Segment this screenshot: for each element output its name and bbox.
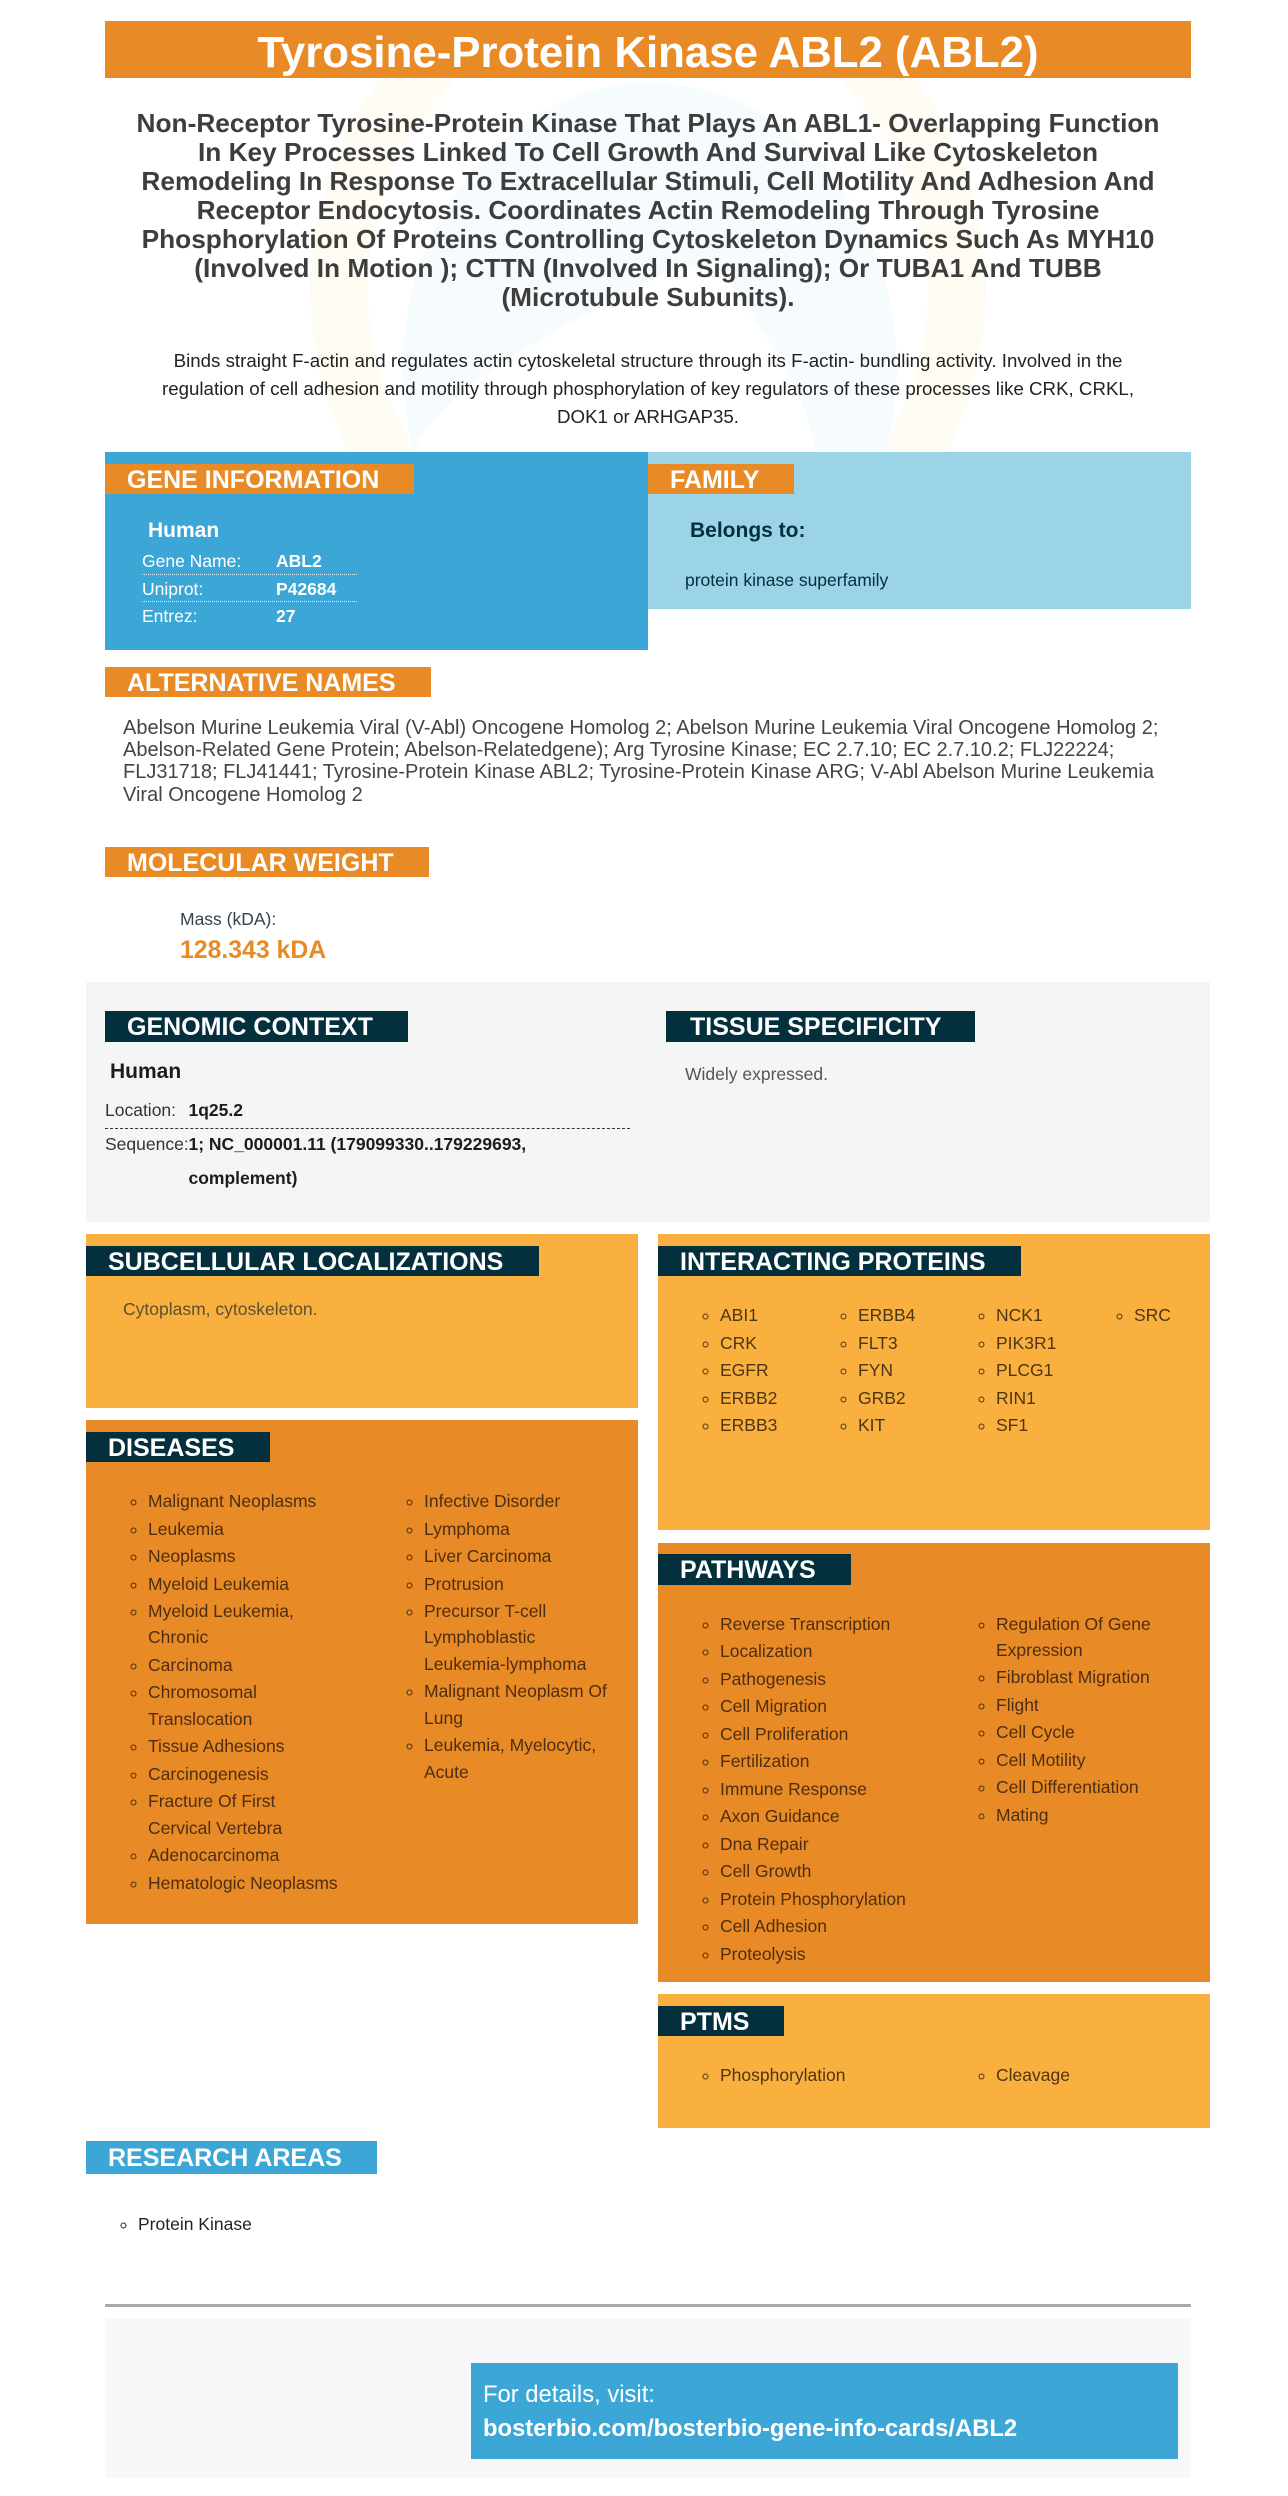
pathway list column 2: Flight [996, 1695, 1039, 1715]
protein list column 3: PIK3R1 [996, 1332, 1056, 1352]
heading: subcellular localizations: SUBCELLULAR LOCALIZATIONS [108, 1248, 503, 1276]
mass label: Mass (kDA): [180, 909, 276, 929]
panel: interacting proteins [658, 1234, 1210, 1530]
location row: 1q25.2 [188, 1100, 243, 1120]
heading: diseases: DISEASES [108, 1434, 234, 1462]
disease list column 1: Carcinoma [148, 1655, 233, 1675]
protein list column 1: EGFR [720, 1360, 769, 1380]
uniprot row [142, 576, 357, 602]
disease list column 1: Adenocarcinoma [148, 1845, 279, 1865]
pathway list column 1: Localization [720, 1641, 812, 1661]
alternative names text: Abelson-Related Gene Protein; Abelson-Relatedgene); Arg Tyrosine Kinase; EC 2.7.10; EC 2.7.10.2; FLJ22224; [123, 739, 1114, 761]
protein list column 3: SF1 [996, 1415, 1028, 1435]
sequence row: complement) [188, 1168, 297, 1188]
pathway list column 2 [978, 1614, 1151, 1825]
sequence row [105, 1134, 526, 1188]
panel: gene information [105, 452, 648, 650]
heading: ptms [658, 2006, 784, 2036]
protein list column 2: FYN [858, 1360, 893, 1380]
description paragraph: DOK1 or ARHGAP35. [557, 406, 739, 427]
pathway list column 1: Fertilization [720, 1751, 809, 1771]
pathway list column 2: Fibroblast Migration [996, 1667, 1150, 1687]
description paragraph [162, 350, 1134, 427]
pathway list column 1: Cell Migration [720, 1696, 827, 1716]
pathway list column 1: Reverse Transcription [720, 1614, 890, 1634]
description paragraph: regulation of cell adhesion and motility through phosphorylation of key regulators of these processes like CRK, CRKL, [162, 378, 1134, 399]
summary heading: Remodeling In Response To Extracellular Stimuli, Cell Motility And Adhesion And [141, 166, 1155, 196]
heading: family: FAMILY [670, 466, 759, 494]
disease list column 2: Leukemia, Myelocytic, [424, 1735, 596, 1755]
heading: pathways [658, 1554, 851, 1585]
pathway list column 1 [702, 1614, 906, 1964]
disease list column 2 [406, 1491, 607, 1782]
protein list column 1: CRK [720, 1332, 757, 1352]
tissue text: Widely expressed. [685, 1064, 828, 1084]
summary heading [137, 108, 1159, 312]
details link box [471, 2363, 1178, 2459]
details label: For details, visit: [483, 2381, 655, 2408]
heading: tissue specificity: TISSUE SPECIFICITY [690, 1013, 941, 1041]
heading: ptms: PTMS [680, 2008, 749, 2036]
entrez row: Entrez: [142, 606, 197, 626]
pathway list column 2: Expression [996, 1640, 1083, 1660]
disease list column 1: Tissue Adhesions [148, 1736, 285, 1756]
species label: Human [148, 519, 219, 542]
protein list column 2: GRB2 [858, 1388, 906, 1408]
background watermark logo [310, 78, 986, 452]
disease list column 2: Lymphoblastic [424, 1627, 535, 1647]
disease list column 2: Lung [424, 1708, 463, 1728]
disease list column 1: Leukemia [148, 1518, 224, 1538]
disease list column 1: Fracture Of First [148, 1791, 275, 1811]
heading: family [648, 464, 794, 494]
heading: research areas: RESEARCH AREAS [108, 2144, 342, 2172]
belongs to label: Belongs to: [690, 519, 806, 542]
disease list column 1: Neoplasms [148, 1546, 236, 1566]
research areas list: Protein Kinase [138, 2214, 252, 2234]
pathway list column 1: Cell Adhesion [720, 1916, 827, 1936]
summary heading: Non-Receptor Tyrosine-Protein Kinase That Plays An ABL1- Overlapping Function [137, 108, 1159, 138]
entrez row: 27 [276, 606, 295, 626]
footer rule [105, 2304, 1191, 2307]
disease list column 1 [130, 1491, 338, 1893]
gene name row: ABL2 [276, 551, 322, 571]
location row: Location: [105, 1100, 176, 1120]
alternative names text: Viral Oncogene Homolog 2 [123, 784, 363, 806]
summary heading: (Involved In Motion ); CTTN (Involved In Signaling); Or TUBA1 And TUBB [194, 253, 1102, 283]
protein list column 2 [840, 1305, 915, 1435]
uniprot row: P42684 [276, 579, 336, 599]
ptm list column 1: Phosphorylation [720, 2064, 846, 2084]
disease list column 2: Malignant Neoplasm Of [424, 1681, 607, 1701]
protein list column 1: ABI1 [720, 1305, 758, 1325]
protein list column 2: KIT [858, 1415, 885, 1435]
entrez row [142, 606, 295, 626]
sequence row: 1; NC_000001.11 (179099330..179229693, [188, 1134, 526, 1154]
pathway list column 2: Cell Differentiation [996, 1777, 1139, 1797]
disease list column 1: Hematologic Neoplasms [148, 1873, 338, 1893]
heading: research areas [86, 2141, 377, 2174]
protein list column 3 [978, 1305, 1056, 1435]
protein list column 3: PLCG1 [996, 1360, 1053, 1380]
heading: pathways: PATHWAYS [680, 1556, 816, 1584]
disease list column 2: Protrusion [424, 1574, 504, 1594]
protein list column 3: RIN1 [996, 1388, 1036, 1408]
title banner: Tyrosine-Protein Kinase ABL2 (ABL2) [257, 28, 1039, 77]
pathway list column 1: Cell Proliferation [720, 1724, 848, 1744]
pathway list column 1: Cell Growth [720, 1861, 811, 1881]
description paragraph: Binds straight F-actin and regulates actin cytoskeletal structure through its F-actin- bundling activity. Involved in the [174, 350, 1122, 371]
summary heading: (Microtubule Subunits). [501, 282, 795, 312]
disease list column 1: Myeloid Leukemia, [148, 1601, 294, 1621]
panel: diseases [86, 1420, 638, 1924]
disease list column 2: Lymphoma [424, 1518, 510, 1538]
summary heading: In Key Processes Linked To Cell Growth And Survival Like Cytoskeleton [198, 137, 1098, 167]
pathway list column 2: Cell Cycle [996, 1722, 1075, 1742]
disease list column 1: Cervical Vertebra [148, 1818, 282, 1838]
details url: bosterbio.com/bosterbio-gene-info-cards/ABL2 [483, 2415, 1017, 2442]
title banner [105, 21, 1191, 78]
disease list column 2: Infective Disorder [424, 1491, 560, 1511]
footer panel [105, 2319, 1191, 2478]
summary heading: Phosphorylation Of Proteins Controlling Cytoskeleton Dynamics Such As MYH10 [142, 224, 1154, 254]
pathway list column 1: Immune Response [720, 1778, 867, 1798]
alternative names text: FLJ31718; FLJ41441; Tyrosine-Protein Kinase ABL2; Tyrosine-Protein Kinase ARG; V-Abl Abelson Murine Leukemia [123, 761, 1154, 783]
pathway list column 1: Dna Repair [720, 1834, 809, 1854]
sequence row: Sequence: [105, 1134, 189, 1154]
species label: Human [110, 1060, 181, 1083]
alternative names text [123, 717, 1158, 806]
ptm list column 2: Cleavage [996, 2064, 1070, 2084]
alternative names text: Abelson Murine Leukemia Viral (V-Abl) Oncogene Homolog 2; Abelson Murine Leukemia Viral Oncogene Homolog 2; [123, 717, 1158, 739]
disease list column 2: Precursor T-cell [424, 1601, 546, 1621]
pathway list column 2: Regulation Of Gene [996, 1614, 1151, 1634]
mass value: 128.343 kDA [180, 937, 326, 964]
heading: gene information: GENE INFORMATION [127, 466, 379, 494]
location row [105, 1097, 630, 1129]
localization text: Cytoplasm, cytoskeleton. [123, 1299, 318, 1319]
protein list column 4: SRC [1134, 1305, 1171, 1325]
protein list column 2: ERBB4 [858, 1305, 915, 1325]
disease list column 2: Leukemia-lymphoma [424, 1654, 586, 1674]
heading: molecular weight: MOLECULAR WEIGHT [127, 849, 394, 877]
pathway list column 1: Protein Phosphorylation [720, 1888, 906, 1908]
pathway list column 2: Cell Motility [996, 1750, 1085, 1770]
family value: protein kinase superfamily [685, 570, 888, 590]
disease list column 1: Carcinogenesis [148, 1764, 269, 1784]
protein list column 1: ERBB2 [720, 1388, 777, 1408]
heading: genomic context: GENOMIC CONTEXT [127, 1013, 373, 1041]
gene name row [142, 548, 357, 575]
pathway list column 1: Pathogenesis [720, 1668, 826, 1688]
panel: ptms [658, 1994, 1210, 2128]
panel: subcellular localizations [86, 1234, 638, 1408]
protein list column 1 [702, 1305, 777, 1435]
disease list column 1: Translocation [148, 1709, 252, 1729]
protein list column 3: NCK1 [996, 1305, 1043, 1325]
panel: pathways [658, 1543, 1210, 1982]
panel: genomic context and tissue specificity [86, 982, 1210, 1222]
disease list column 1: Chromosomal [148, 1682, 257, 1702]
pathway list column 2: Mating [996, 1805, 1049, 1825]
disease list column 2: Acute [424, 1762, 469, 1782]
protein list column 2: FLT3 [858, 1332, 898, 1352]
heading: diseases [86, 1432, 270, 1462]
uniprot row: Uniprot: [142, 579, 203, 599]
heading: alternative names: ALTERNATIVE NAMES [127, 669, 396, 697]
protein list column 1: ERBB3 [720, 1415, 777, 1435]
gene name row: Gene Name: [142, 551, 241, 571]
disease list column 1: Chronic [148, 1627, 208, 1647]
pathway list column 1: Proteolysis [720, 1944, 806, 1964]
disease list column 1: Myeloid Leukemia [148, 1574, 289, 1594]
disease list column 2: Liver Carcinoma [424, 1546, 551, 1566]
heading: interacting proteins: INTERACTING PROTEINS [680, 1248, 986, 1276]
pathway list column 1: Axon Guidance [720, 1806, 840, 1826]
panel: family [648, 452, 1191, 609]
summary heading: Receptor Endocytosis. Coordinates Actin Remodeling Through Tyrosine [197, 195, 1099, 225]
disease list column 1: Malignant Neoplasms [148, 1491, 316, 1511]
